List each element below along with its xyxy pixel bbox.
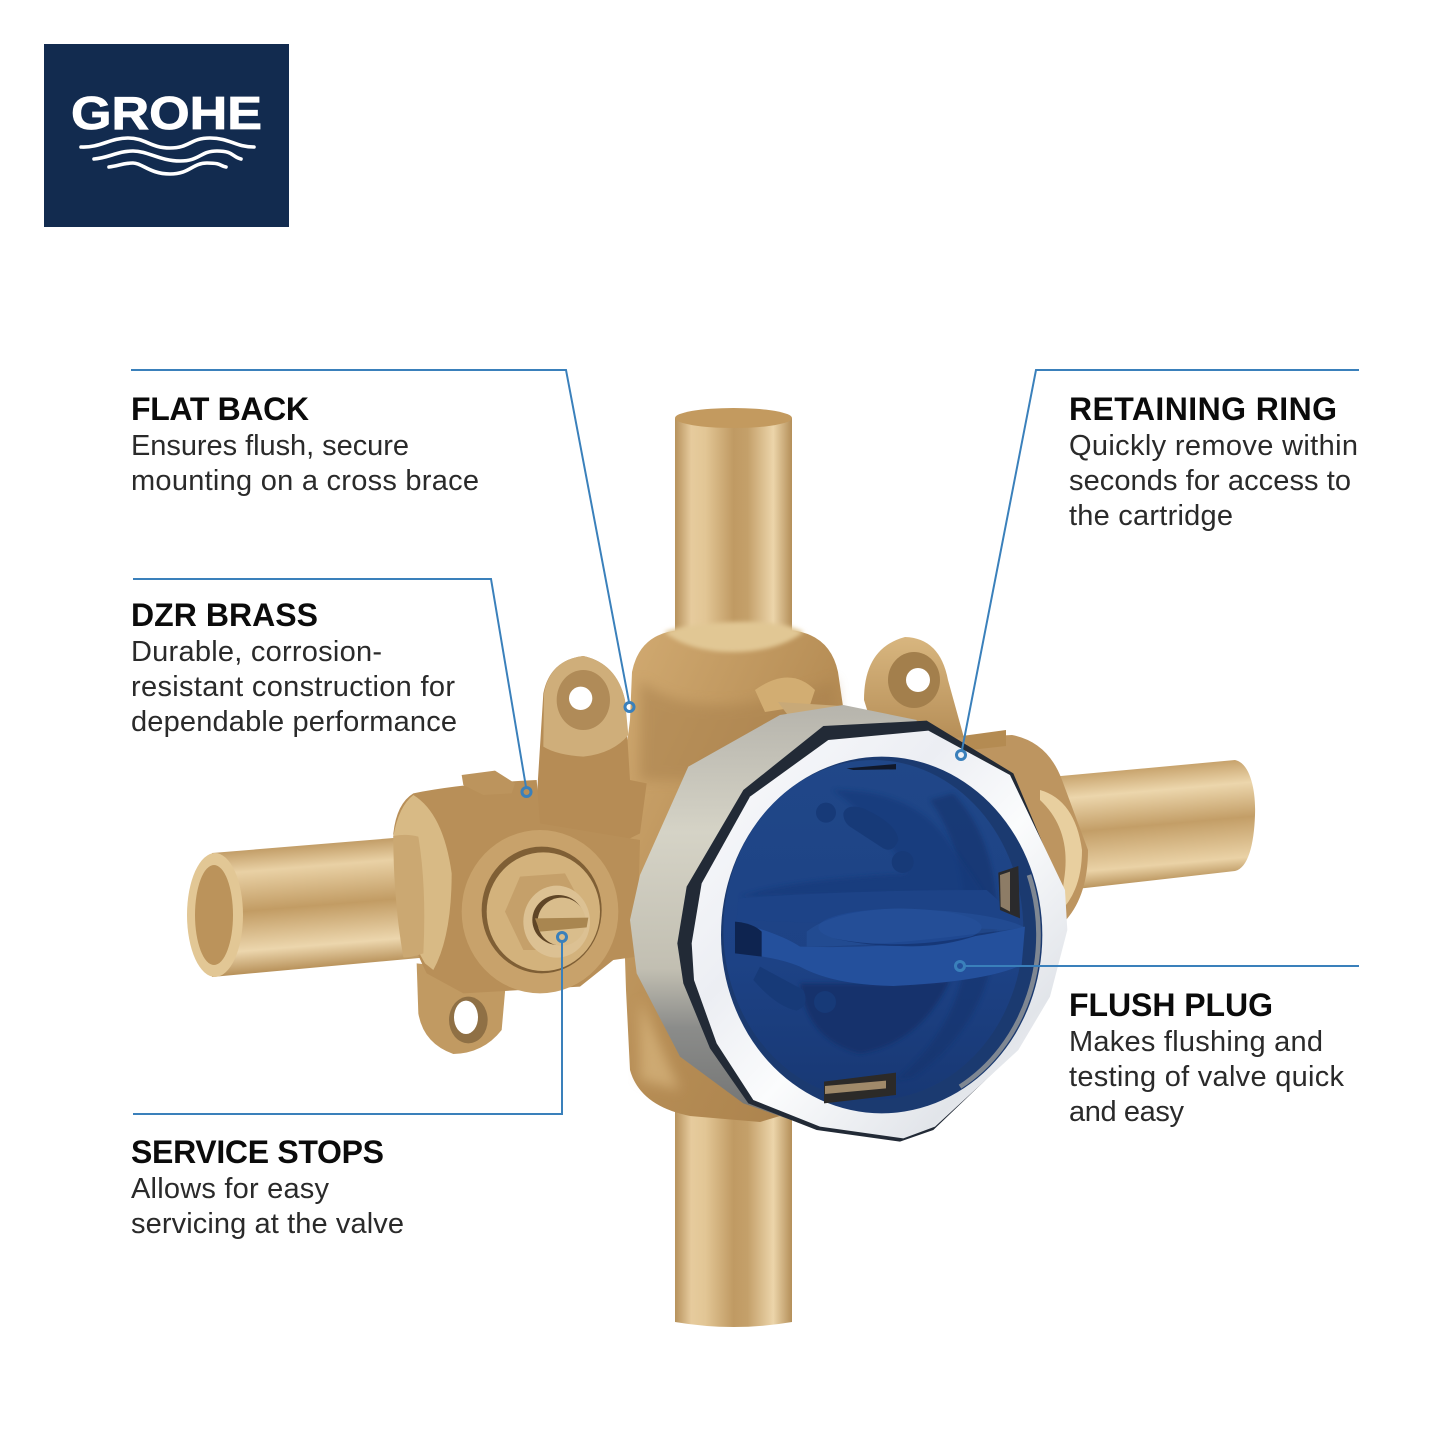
- text: retaining ring: RETAINING RING: [1069, 391, 1337, 427]
- text: DZR brass: Durable, corrosion-: [131, 636, 382, 668]
- chrome retaining ring: [692, 731, 1067, 1138]
- callout line: retaining ring: [956, 370, 1359, 760]
- lower mounting ear: [417, 963, 507, 1054]
- text: service stops: Allows for easy: [131, 1173, 330, 1205]
- bottom pipe: [675, 1100, 792, 1327]
- callout line: service stops: [133, 932, 566, 1114]
- text: flat back: Ensures flush, secure: [131, 430, 409, 462]
- upper mounting ear: [537, 656, 647, 847]
- knob slots: [753, 803, 914, 1013]
- callout line: flush plug: [956, 962, 1359, 970]
- text: DZR brass: dependable performance: [131, 706, 457, 738]
- text: flat back: mounting on a cross brace: [131, 465, 479, 497]
- cartridge slots: [824, 1073, 896, 1103]
- text: retaining ring: seconds for access to: [1069, 465, 1351, 497]
- left pipe flange: [393, 795, 452, 970]
- callout line: DZR brass: [133, 579, 531, 796]
- GROHE logo: [44, 44, 289, 227]
- pipe collar: [664, 622, 804, 652]
- right mounting ear: [864, 637, 966, 745]
- left pipe: [187, 835, 430, 977]
- right pipe: [1050, 760, 1255, 892]
- text: flush plug: FLUSH PLUG: [1069, 987, 1273, 1023]
- text: service stops: servicing at the valve: [131, 1208, 404, 1240]
- handle ring: [735, 908, 1025, 986]
- text: flush plug: [1069, 987, 1344, 1128]
- text: retaining ring: the cartridge: [1069, 500, 1233, 532]
- text: DZR brass: [131, 597, 457, 738]
- service stop: [462, 830, 618, 993]
- GROHE logo: GROHE: [71, 87, 262, 139]
- callout line: flat back: [131, 370, 634, 712]
- text: flat back: FLAT BACK: [131, 391, 309, 427]
- valve front assembly, traced in zoom coordinates: [630, 705, 1067, 1142]
- text: flush plug: testing of valve quick: [1069, 1061, 1344, 1093]
- text: DZR brass: DZR BRASS: [131, 597, 318, 633]
- retaining clip: [462, 771, 515, 795]
- right hub: [950, 730, 1088, 920]
- hub casting: [393, 780, 640, 993]
- text: retaining ring: Quickly remove within: [1069, 430, 1358, 462]
- top pipe: [675, 408, 792, 650]
- text: retaining ring: [1069, 391, 1358, 532]
- brass central body: [620, 630, 860, 1122]
- text: flat back: [131, 391, 479, 497]
- text: flush plug: Makes flushing and: [1069, 1026, 1323, 1058]
- text: service stops: [131, 1134, 404, 1240]
- valve illustration: [187, 408, 1255, 1327]
- text: flush plug: and easy: [1069, 1096, 1184, 1128]
- left hub and service-stop housing, traced in zoom coordinates: [393, 656, 647, 1054]
- black gasket: [677, 721, 1060, 1142]
- text: DZR brass: resistant construction for: [131, 671, 455, 703]
- blue flush plug: [721, 757, 1042, 1113]
- brushed silver band: [630, 705, 920, 1130]
- text: service stops: SERVICE STOPS: [131, 1134, 384, 1170]
